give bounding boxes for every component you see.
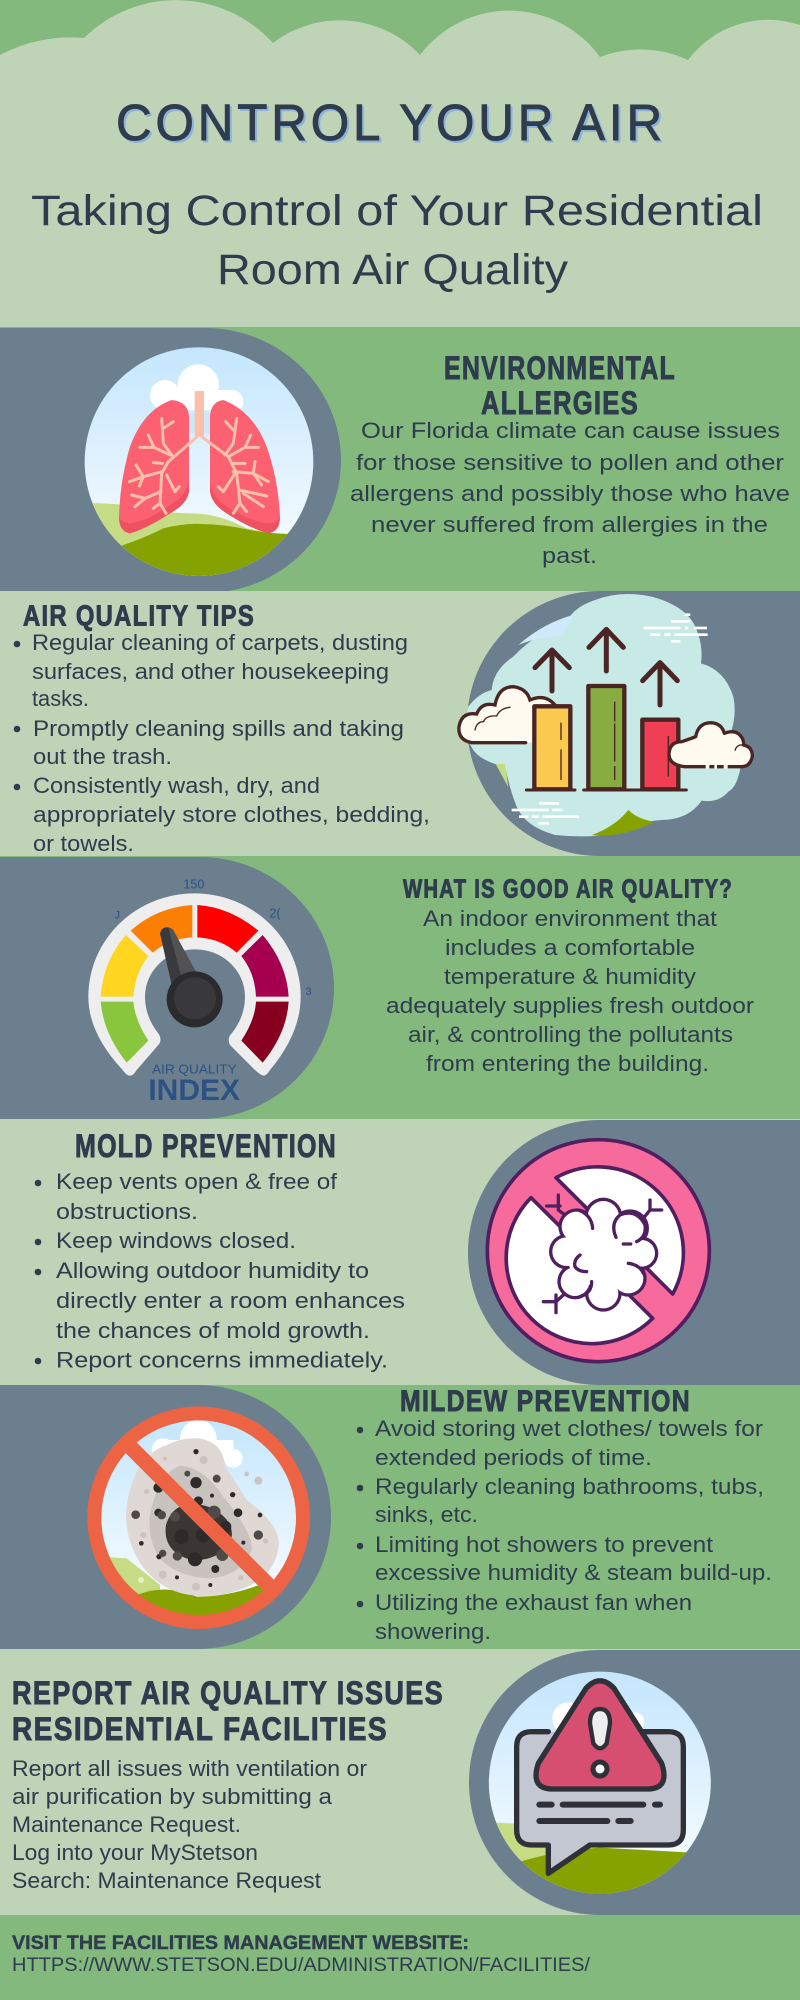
list: sinks, etc. [375, 1502, 478, 1527]
cloud banner [0, 0, 800, 327]
text block: An indoor environment that [423, 906, 717, 931]
title: CONTROL YOUR AIR [116, 94, 666, 151]
icon: no mold [487, 1140, 709, 1362]
text block [386, 906, 754, 1076]
list: directly enter a room enhances [56, 1288, 405, 1313]
scale labels: J [114, 909, 120, 921]
scale labels [114, 877, 312, 998]
list: Regularly cleaning bathrooms, tubs, [375, 1474, 764, 1499]
icon: no mildew [94, 1413, 303, 1622]
list: Keep windows closed. [56, 1228, 296, 1253]
list: showering. [375, 1619, 491, 1644]
slate backing shape [467, 591, 800, 856]
text block: adequately supplies fresh outdoor [386, 993, 754, 1018]
list: obstructions. [56, 1199, 198, 1224]
green band [0, 1385, 800, 1649]
text block: Search: Maintenance Request [12, 1868, 321, 1893]
text block: allergens and possibly those who have [350, 481, 790, 506]
panel: footer [0, 1915, 800, 2000]
text block: past. [542, 543, 597, 568]
slate backing shape [0, 1385, 331, 1649]
heading [12, 1675, 444, 1747]
list: appropriately store clothes, bedding, [33, 802, 430, 827]
text block: temperature & humidity [444, 964, 696, 989]
slate backing shape [0, 857, 334, 1119]
icon: air quality gauge: AIR QUALITY [152, 1062, 237, 1076]
streaks [512, 613, 708, 825]
list: Allowing outdoor humidity to [56, 1258, 369, 1283]
green band [0, 327, 800, 590]
list: surfaces, and other housekeeping [32, 659, 389, 684]
title: CONTROL YOUR AIR [118, 96, 668, 153]
panel: air quality tips [0, 591, 800, 856]
list: tasks. [32, 686, 89, 711]
green band [0, 856, 800, 1119]
heading [444, 350, 676, 421]
text block: for those sensitive to pollen and other [356, 450, 784, 475]
light band [0, 1649, 800, 1915]
text block: Maintenance Request. [12, 1812, 241, 1837]
list [14, 630, 430, 856]
text block: air, & controlling the pollutants [408, 1022, 733, 1047]
text block [12, 1756, 367, 1893]
light band [0, 591, 800, 856]
bars [534, 686, 678, 789]
list: Keep vents open & free of [56, 1169, 338, 1194]
needle [160, 927, 197, 985]
panel: mildew prevention [0, 1385, 800, 1649]
list: Report concerns immediately. [56, 1348, 388, 1372]
scale labels: 2( [269, 906, 281, 920]
icon: air quality gauge: INDEX [148, 1074, 240, 1107]
text block: Log into your MyStetson [12, 1840, 258, 1865]
panel: mold prevention [0, 1119, 800, 1385]
subtitle: Room Air Quality [217, 246, 569, 294]
icon: air quality gauge [88, 877, 312, 1107]
website label: VISIT THE FACILITIES MANAGEMENT WEBSITE: [12, 1933, 469, 1954]
slate backing shape [469, 1650, 800, 1915]
icon: lungs [80, 347, 313, 580]
text block: Our Florida climate can cause issues [361, 418, 780, 443]
icon: warning speech bubble [487, 1672, 713, 1898]
text block: from entering the building. [426, 1051, 709, 1076]
right cloud [669, 723, 752, 767]
light band [0, 1119, 800, 1385]
heading: REPORT AIR QUALITY ISSUES [12, 1675, 444, 1711]
list: Consistently wash, dry, and [33, 773, 320, 798]
text block: includes a comfortable [445, 935, 695, 960]
list [35, 1169, 405, 1372]
subtitle [31, 187, 763, 294]
list: or towels. [33, 831, 134, 856]
heading: MILDEW PREVENTION [400, 1385, 691, 1418]
slate backing shape [0, 328, 341, 593]
heading: MOLD PREVENTION [75, 1128, 337, 1164]
list: Limiting hot showers to prevent [375, 1532, 713, 1557]
text block: air purification by submitting a [12, 1784, 333, 1809]
scale labels: 3 [305, 986, 312, 998]
scale labels: 150 [183, 877, 204, 891]
subtitle: Taking Control of Your Residential [31, 187, 763, 235]
panel: what is good air quality [0, 856, 800, 1119]
slate backing shape [468, 1120, 800, 1385]
list: Regular cleaning of carpets, dusting [32, 630, 408, 655]
panel: report air quality issues [0, 1649, 800, 1915]
list: Avoid storing wet clothes/ towels for [375, 1416, 763, 1441]
arrows [535, 629, 677, 705]
heading: ALLERGIES [481, 385, 639, 421]
list: Utilizing the exhaust fan when [375, 1590, 692, 1615]
list [357, 1416, 772, 1644]
list: out the trash. [33, 744, 172, 769]
list: the chances of mold growth. [56, 1318, 370, 1343]
list: extended periods of time. [375, 1445, 652, 1470]
left cloud [459, 687, 555, 743]
heading: AIR QUALITY TIPS [23, 600, 255, 632]
list: excessive humidity & steam build-up. [375, 1560, 772, 1585]
list: Promptly cleaning spills and taking [33, 716, 404, 741]
text block: never suffered from allergies in the [371, 512, 768, 537]
panel: header [0, 0, 800, 327]
text block: Report all issues with ventilation or [12, 1756, 367, 1781]
text block [350, 418, 790, 568]
icon: rising bar chart [459, 594, 752, 836]
panel: environmental allergies [0, 327, 800, 593]
heading: ENVIRONMENTAL [444, 350, 676, 386]
website url: HTTPS://WWW.STETSON.EDU/ADMINISTRATION/FACILITIES/ [12, 1955, 591, 1976]
footer band [0, 1915, 800, 2000]
heading: RESIDENTIAL FACILITIES [12, 1711, 388, 1747]
